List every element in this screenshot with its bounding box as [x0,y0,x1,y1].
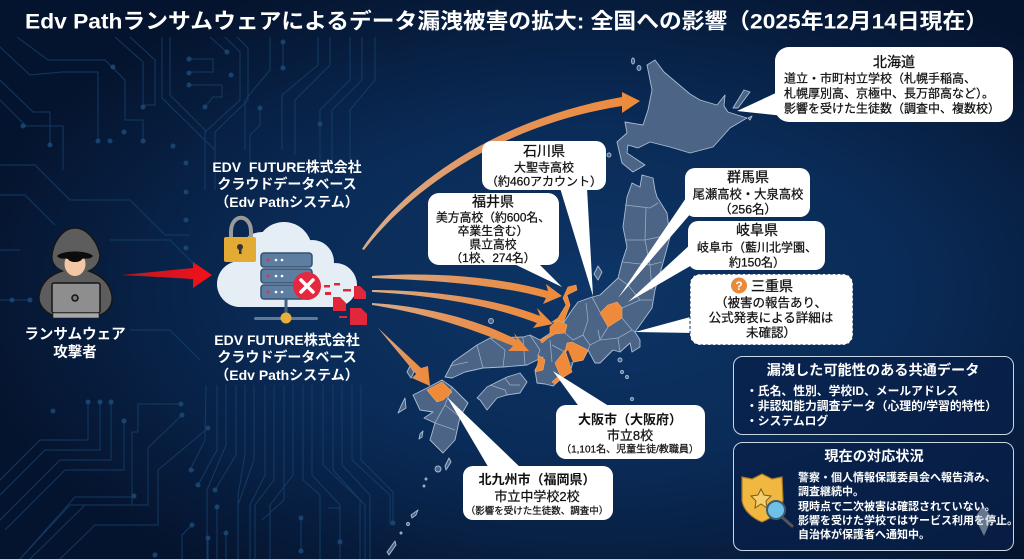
label: attacker [24,326,126,361]
callout: Ishikawa [482,141,606,296]
callout: Osaka [553,371,705,459]
callout: Mie: ? [735,279,743,293]
callout: Fukui: 福井県 [472,194,514,210]
list: data items [746,384,997,428]
heading: common data: 漏洩した可能性のある共通データ [767,362,979,379]
callout: Mie: 未確認） [746,325,796,340]
label: attacker: 攻撃者 [53,343,97,361]
callout: Ishikawa: 大聖寺高校 [514,160,574,174]
callout: Gunma: 群馬県 [727,169,769,185]
label: database bottom: （Edv Pathシステム） [215,367,359,383]
text: response details [798,470,1018,541]
callout: Hokkaido [737,47,1013,122]
label: database top: クラウドデータベース [217,176,357,192]
label: database bottom [214,332,360,383]
panel: common leaked data [734,356,1014,434]
list: data items: ・氏名、性別、学校ID、メールアドレス [746,384,958,398]
icon: hacker [39,228,112,318]
map of Japan [387,58,752,555]
callout: Gunma: 尾瀬高校・大泉高校 [693,186,803,202]
callout: Ishikawa: （約460アカウント） [486,174,602,188]
callout: Hokkaido: 札幌厚別高、京極中、長万部高など）。 [784,86,994,100]
callout: Hokkaido: 影響を受けた生徒数（調査中、複数校） [784,100,1000,116]
callout: Mie [635,274,853,345]
arrow: to Hokkaido [362,92,640,250]
callout: Gunma: （256名） [719,202,777,216]
icon: faint pin mark [975,505,992,536]
text: response details: 警察・個人情報保護委員会へ報告済み、 [798,470,996,484]
label: database top [212,159,362,210]
arrow: to Fukui [372,290,553,328]
arrow: to Osaka region [372,303,529,351]
icon: police badge [742,474,792,526]
callout: Fukui: 美方高校（約600名、 [436,210,550,224]
callout: Osaka: 市立8校 [607,428,653,443]
text: response details: 調査継続中。 [798,484,864,498]
heading: current response: 現在の対応状況 [824,448,924,465]
icon: cloud database [217,218,367,325]
callout: Kitakyushu: （影響を受けた生徒数、調査中） [466,505,608,517]
label: database bottom: EDV FUTURE株式会社 [214,332,360,348]
callout: Osaka: 大阪市（大阪府） [578,412,682,427]
callout: Kitakyushu: 市立中学校2校 [494,489,580,504]
callout: Gifu [628,221,825,302]
callout: Mie: 三重県 [751,278,793,294]
arrow: to Kitakyushu [378,328,430,386]
callout: Kitakyushu [447,397,613,520]
title: Edv Pathランサムウェアによるデータ漏洩被害の拡大: 全国への影響（2025年12月14日現在） [25,8,988,34]
list: data items: ・システムログ [746,414,828,428]
callout: Mie: 公式発表による詳細は [709,310,833,325]
callout: Gifu: 岐阜県 [736,222,778,238]
arrow: to Ishikawa [372,275,562,304]
label: attacker: ランサムウェア [24,326,126,343]
list: data items: ・非認知能力調査データ（心理的/学習的特性） [746,399,997,413]
text: response details: 影響を受けた学校ではサービス利用を停止。 [798,513,1018,527]
callout: Hokkaido: 北海道 [873,54,915,70]
callout: Gifu: 約150名） [729,254,785,270]
callout: Gifu: 岐阜市（藍川北学園、 [697,240,817,254]
callout: Hokkaido: 道立・市町村立学校（札幌手稲高、 [784,70,976,86]
label: database bottom: クラウドデータベース [217,349,357,365]
label: database top: EDV FUTURE株式会社 [212,159,362,175]
callout: Gunma [618,168,810,298]
callout: Fukui: （1校、274名） [450,251,536,265]
callout: Fukui [428,193,562,287]
label: database top: （Edv Pathシステム） [215,194,359,210]
callout: Ishikawa: 石川県 [523,143,565,159]
callout: Osaka: （1,101名、児童生徒/教職員） [561,442,699,456]
callout: Fukui: 県立高校 [469,238,517,252]
text: response details: 現時点で二次被害は確認されていない。 [798,499,996,513]
callout: Mie: （被害の報告あり、 [715,295,827,310]
text: response details: 自治体が保護者へ通知中。 [798,527,930,541]
callout: Kitakyushu: 北九州市（福岡県） [478,472,596,487]
panel: current response [734,442,1018,550]
arrow: attacker to cloud [122,262,212,288]
callout: Fukui: 卒業生含む） [458,224,528,238]
